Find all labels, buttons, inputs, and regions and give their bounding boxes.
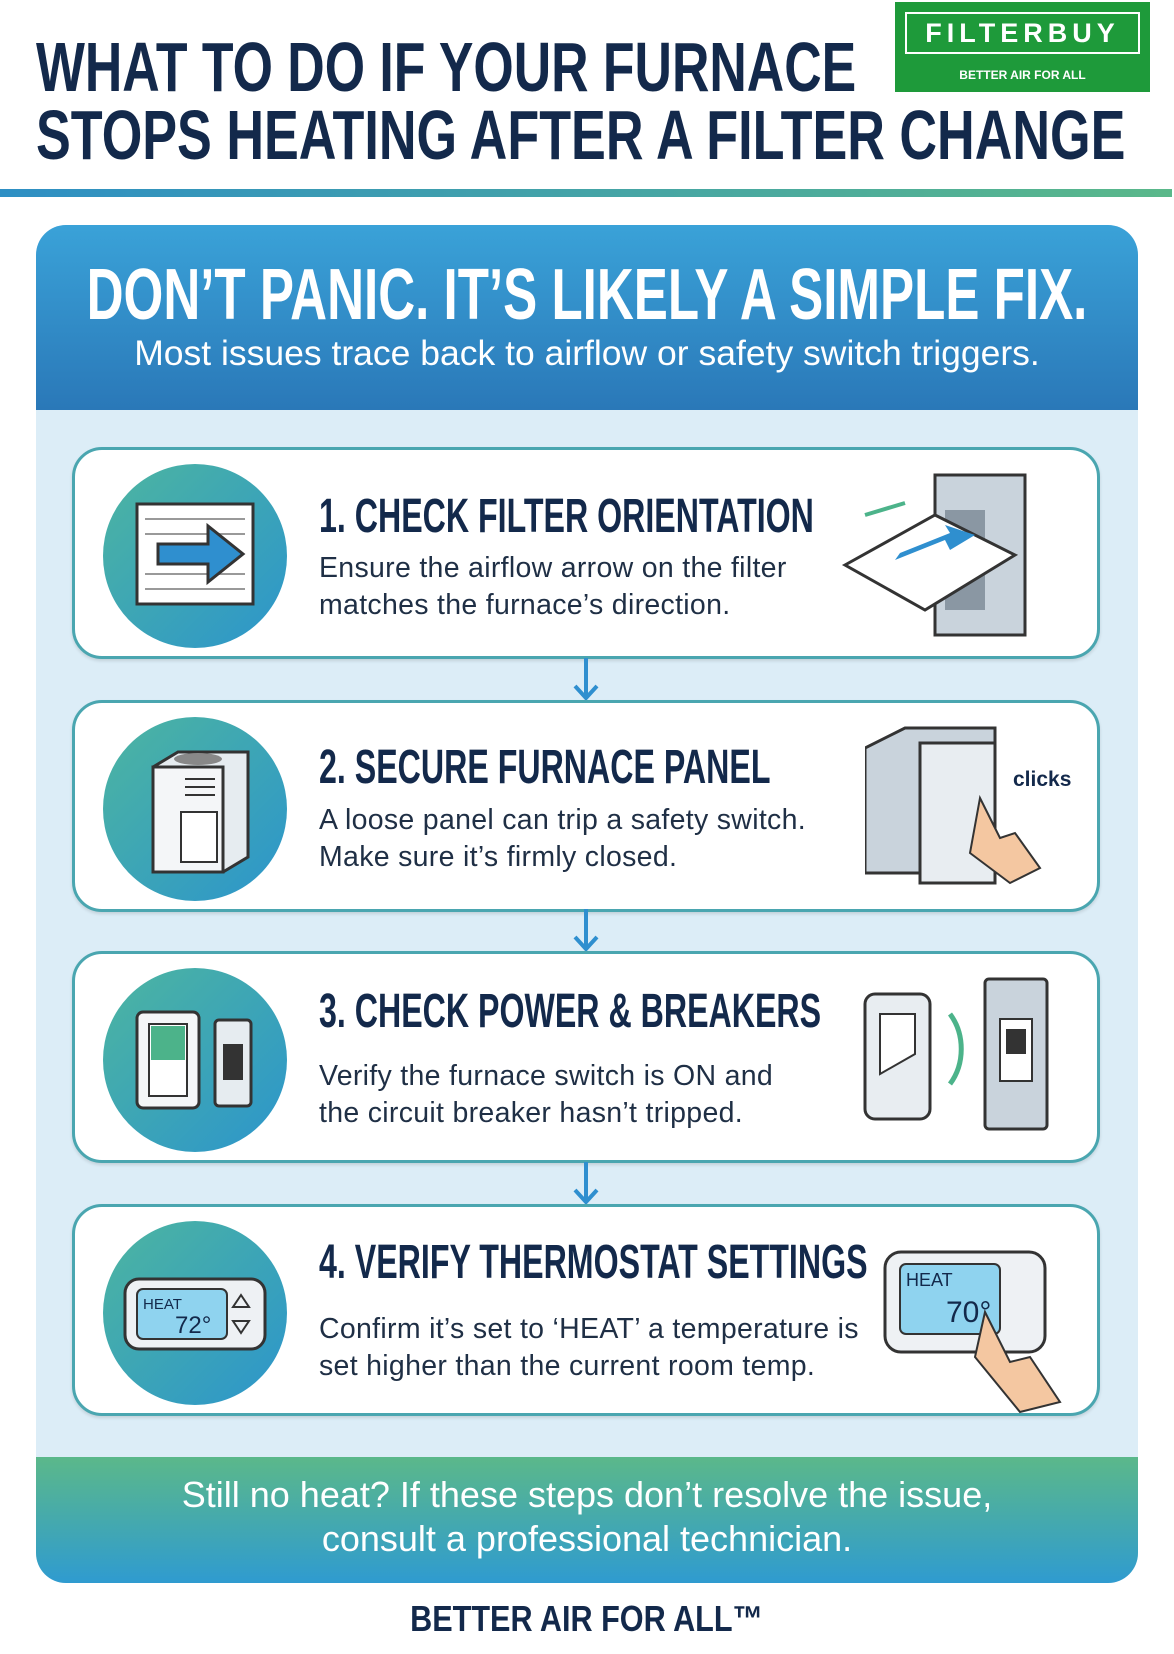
illustration: thermostat with hand: 70° — [946, 1296, 991, 1329]
main panel — [36, 225, 1138, 1583]
heading 2: 2. SECURE FURNACE PANEL — [319, 741, 770, 794]
panel header — [36, 225, 1138, 410]
card 2 — [72, 700, 1100, 912]
illustration: panel click — [865, 726, 1071, 884]
header headline: DON’T PANIC. IT’S LIKELY A SIMPLE FIX. — [87, 255, 1087, 335]
text 2 — [319, 804, 806, 873]
divider — [0, 189, 1172, 197]
icon: thermostat: 72° — [175, 1312, 211, 1339]
card 3 — [72, 951, 1100, 1163]
text 4: Confirm it’s set to ‘HEAT’ a temperature is — [319, 1313, 859, 1345]
icon: thermostat: HEAT — [143, 1296, 182, 1313]
text 3 — [319, 1060, 773, 1129]
heading 1: 1. CHECK FILTER ORIENTATION — [319, 490, 814, 543]
logo: FILTERBUY — [925, 18, 1120, 48]
logo: BETTER AIR FOR ALL — [959, 68, 1086, 82]
icon: switches — [103, 968, 287, 1152]
arrow 2 — [574, 909, 598, 951]
bottom callout — [36, 1457, 1138, 1583]
text 1: matches the furnace’s direction. — [319, 589, 730, 621]
text 1: Ensure the airflow arrow on the filter — [319, 552, 787, 584]
icon: filter — [103, 464, 287, 648]
text 4 — [319, 1313, 859, 1382]
illustration: thermostat with hand — [884, 1250, 1062, 1414]
title: WHAT TO DO IF YOUR FURNACE — [36, 28, 856, 106]
header subtext: Most issues trace back to airflow or safety switch triggers. — [134, 333, 1040, 373]
title — [36, 28, 1125, 174]
arrow 1 — [574, 658, 598, 700]
heading 4: 4. VERIFY THERMOSTAT SETTINGS — [319, 1236, 868, 1289]
footer tagline: BETTER AIR FOR ALL™ — [410, 1598, 764, 1639]
text 3: the circuit breaker hasn’t tripped. — [319, 1097, 743, 1129]
text 3: Verify the furnace switch is ON and — [319, 1060, 773, 1092]
text 2: Make sure it’s firmly closed. — [319, 841, 677, 873]
illustration: switches — [864, 978, 1048, 1130]
title: STOPS HEATING AFTER A FILTER CHANGE — [36, 96, 1125, 174]
illustration: filter sliding into furnace — [842, 474, 1026, 636]
logo — [895, 2, 1150, 92]
card 1 — [72, 447, 1100, 659]
bottom callout: consult a professional technician. — [322, 1518, 852, 1559]
illustration: thermostat with hand: HEAT — [906, 1270, 953, 1290]
text 1 — [319, 552, 787, 621]
icon: thermostat — [103, 1221, 287, 1405]
heading 3: 3. CHECK POWER & BREAKERS — [319, 985, 821, 1038]
icon: furnace — [103, 717, 287, 901]
bottom callout: Still no heat? If these steps don’t resolve the issue, — [182, 1474, 992, 1515]
arrow 3 — [574, 1162, 598, 1204]
text 2: A loose panel can trip a safety switch. — [319, 804, 806, 836]
illustration: panel click: clicks — [1013, 768, 1071, 791]
card 4 — [72, 1204, 1100, 1416]
text 4: set higher than the current room temp. — [319, 1350, 815, 1382]
